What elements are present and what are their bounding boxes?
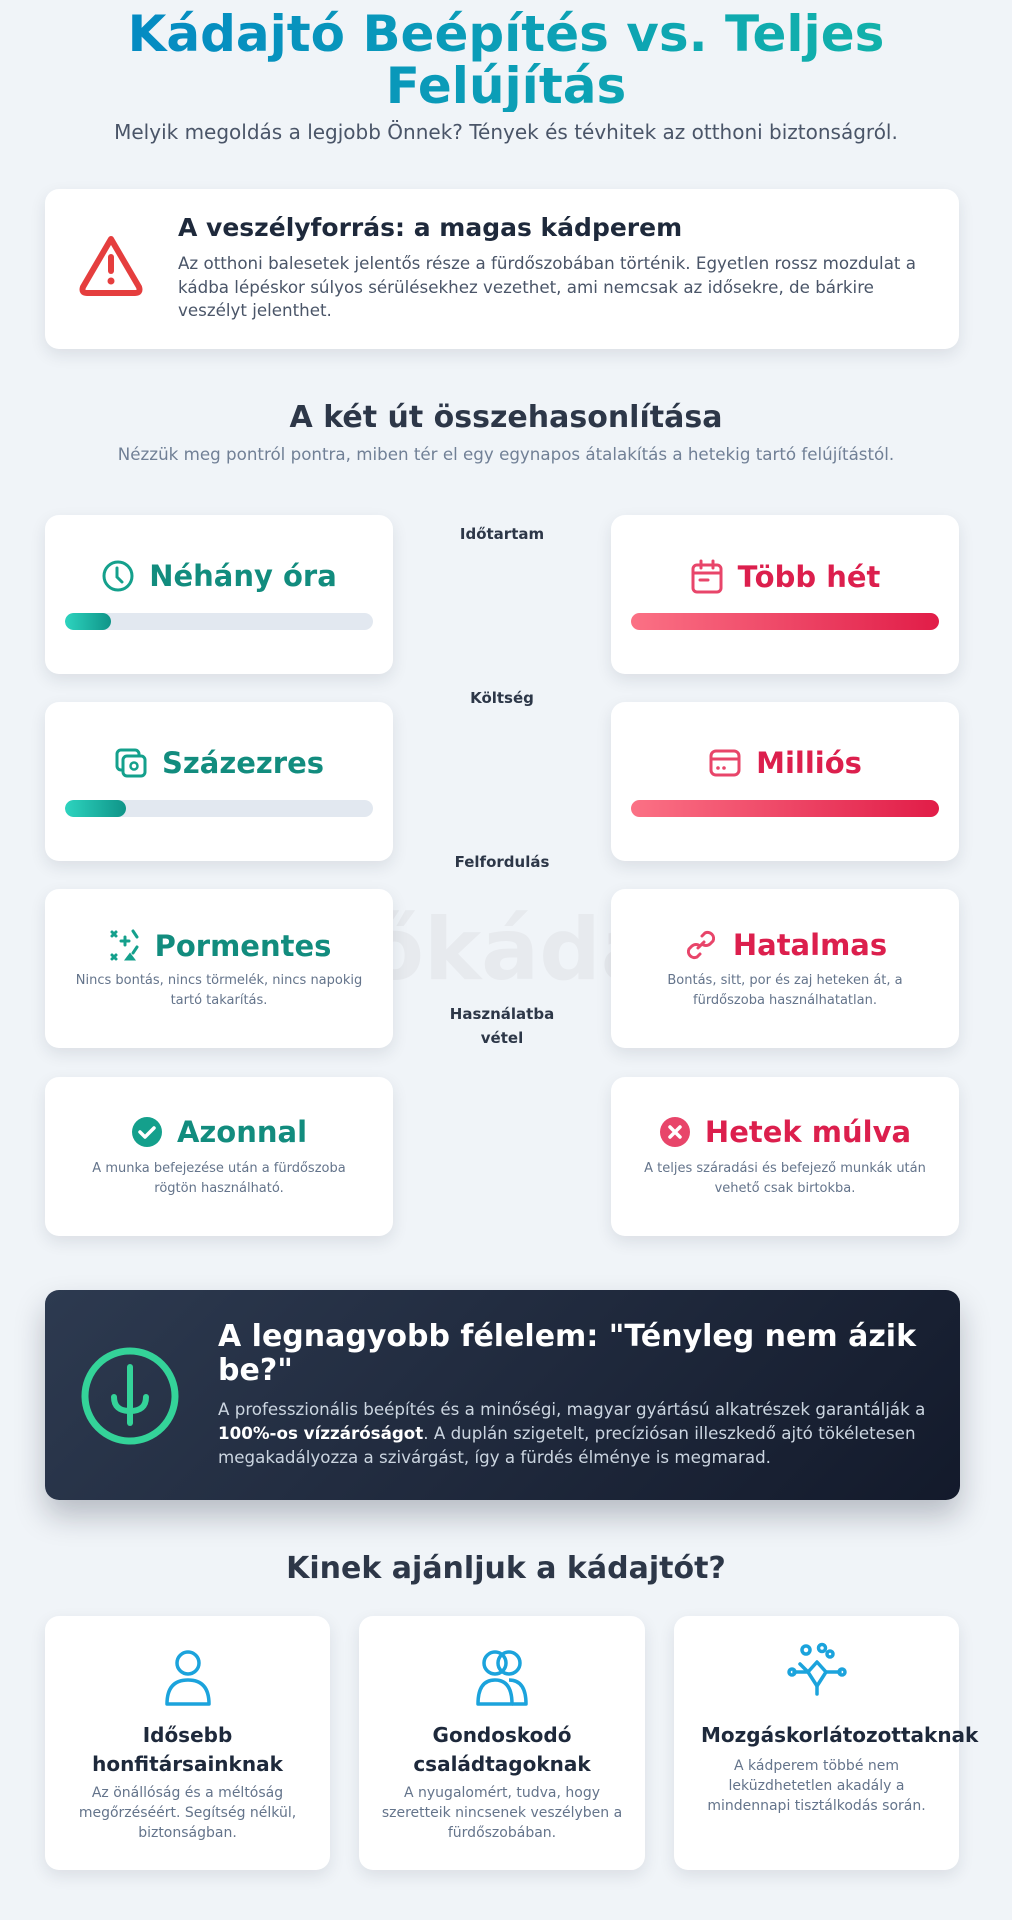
label: Időtartam: Időtartam (460, 525, 544, 543)
text: 100%-os vízzáróságot. A duplán szigetelt, precíziósan illeszkedő ajtó tökéletesen (218, 1423, 916, 1443)
card: family: A nyugalomért, tudva, hogy (404, 1785, 600, 1801)
card: mobility (674, 1616, 959, 1870)
card: Milliós (611, 702, 959, 861)
card: Pormentes (45, 889, 393, 1048)
label: Használatba vétel: Használatba (450, 1005, 554, 1023)
card: family (359, 1616, 645, 1870)
text (218, 1399, 925, 1467)
text (178, 253, 916, 320)
text: Az otthoni balesetek jelentős része a fürdőszobában történik. Egyetlen rossz mozdulat a (178, 253, 916, 273)
card: family: családtagoknak (413, 1752, 591, 1776)
text: kádba lépéskor súlyos sérülésekhez vezethet, ami nemcsak az idősekre, de bárkire (178, 276, 874, 296)
card: Hetek múlva: Hetek múlva (705, 1115, 911, 1149)
icon: person (165, 1650, 211, 1706)
card: Hatalmas: fürdőszoba használhatatlan. (693, 993, 877, 1008)
heading: A legnagyobb félelem: "Tényleg nem ázik (218, 1319, 916, 1354)
text: megakadályozza a szivárgást, így a fürdés élménye is megmarad. (218, 1447, 771, 1467)
heading: audience: Kinek ajánljuk a kádajtót? (286, 1551, 726, 1586)
card: mobility: leküzdhetetlen akadály a (729, 1778, 904, 1794)
card: seniors: megőrzéséért. Segítség nélkül, (79, 1805, 296, 1821)
card: Azonnal: rögtön használható. (154, 1181, 284, 1196)
icon: two people (476, 1650, 528, 1706)
card: mobility: A kádperem többé nem (734, 1758, 899, 1774)
card: Hatalmas (611, 889, 959, 1048)
icon: water-tight (82, 1348, 178, 1444)
card: Pormentes: Nincs bontás, nincs törmelék, nincs napokig (76, 973, 362, 988)
card: Pormentes: Pormentes (155, 929, 331, 963)
title: Kádajtó Beépítés vs. Teljes (128, 5, 884, 63)
text: veszélyt jelenthet. (178, 300, 332, 320)
card: family: fürdőszobában. (448, 1825, 556, 1841)
heading: be?" (218, 1353, 293, 1388)
card: seniors: Az önállóság és a méltóság (92, 1785, 283, 1801)
label: Használatba vétel (450, 1005, 554, 1047)
card: seniors (45, 1616, 330, 1870)
card: Néhány óra (45, 515, 393, 674)
label: Felfordulás: Felfordulás (455, 853, 549, 871)
watermark: fürdőkádajtón (162, 900, 850, 1000)
subtitle: Melyik megoldás a legjobb Önnek? Tények és tévhitek az otthoni biztonságról. (114, 120, 898, 144)
card: Hetek múlva: vehető csak birtokba. (715, 1181, 855, 1196)
card: Több hét: Több hét (738, 560, 880, 594)
card: Hetek múlva (611, 1077, 959, 1236)
text: A professzionális beépítés és a minőségi, magyar gyártású alkatrészek garantálják a (218, 1399, 925, 1419)
card: Hatalmas: Bontás, sitt, por és zaj heteken át, a (667, 973, 903, 988)
label: Költség: Költség (470, 689, 534, 707)
card: seniors: Idősebb (143, 1723, 232, 1747)
card: Hatalmas: Hatalmas (733, 928, 887, 962)
card: Azonnal: Azonnal (177, 1115, 307, 1149)
card: Pormentes: tartó takarítás. (171, 993, 267, 1008)
card: Százezres (45, 702, 393, 861)
title: Felújítás (386, 57, 626, 115)
card: family: Gondoskodó (433, 1723, 571, 1747)
panel: biggest fear (45, 1290, 960, 1500)
heading: comparison: A két út összehasonlítása (290, 400, 722, 435)
icon: accessibility (787, 1642, 847, 1696)
card: mobility: mindennapi tisztálkodás során. (707, 1798, 926, 1814)
heading (218, 1319, 917, 1388)
card: Milliós: Milliós (756, 746, 862, 780)
label: Használatba vétel: vétel (481, 1029, 523, 1047)
card: Néhány óra: Néhány óra (149, 559, 337, 593)
card: Azonnal (45, 1077, 393, 1236)
card: mobility: Mozgáskorlátozottaknak (701, 1723, 978, 1747)
title (0, 8, 1012, 112)
card: Több hét (611, 515, 959, 674)
card: Azonnal: A munka befejezése után a fürdőszoba (92, 1161, 346, 1176)
card: Százezres: Százezres (162, 746, 324, 780)
card: seniors: honfitársainknak (92, 1752, 283, 1776)
card: seniors: biztonságban. (138, 1825, 237, 1841)
card: family: szeretteik nincsenek veszélyben a (382, 1805, 622, 1821)
icon: warning (80, 236, 142, 296)
card: Hetek múlva: A teljes száradási és befejező munkák után (644, 1161, 926, 1176)
heading: A veszélyforrás: a magas kádperem (178, 213, 682, 242)
subtext: Nézzük meg pontról pontra, miben tér el egy egynapos átalakítás a hetekig tartó felújítástól. (118, 444, 894, 464)
panel: danger (45, 189, 959, 349)
